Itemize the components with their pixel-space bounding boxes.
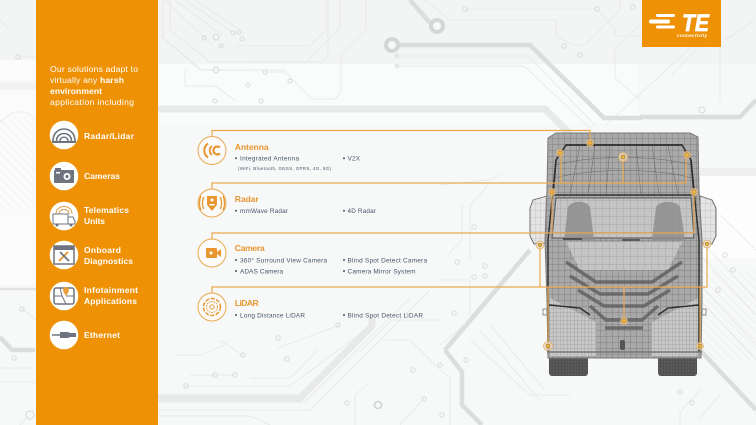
radar list: mmWave Radar <box>240 208 289 215</box>
heading: LiDAR: LiDAR <box>235 298 259 308</box>
section: Radar <box>198 189 377 217</box>
camera list: Camera Mirror System <box>348 268 416 275</box>
item: Cameras: Cameras <box>84 171 120 181</box>
lidar list: Blind Spot Detect LiDAR <box>348 312 423 319</box>
item: Telematics Units: Telematics <box>84 205 129 215</box>
camera list: 360° Surround View Camera <box>240 256 327 264</box>
antenna list: (WiFi, Bluetooth, GNSS, GPRS, 4G, 5G) <box>238 166 332 171</box>
item: Radar/Lidar <box>50 121 135 149</box>
item: Cameras <box>50 162 120 190</box>
item: Onboard Diagnostics <box>50 241 133 269</box>
heading: Antenna: Antenna <box>235 142 269 152</box>
logo: TE connectivity: connectivity <box>677 33 707 38</box>
sensor nodes <box>536 140 711 350</box>
antenna list <box>235 156 361 171</box>
left orange panel <box>36 0 158 425</box>
truck grille bands <box>566 262 682 328</box>
truck tires <box>549 352 697 376</box>
antenna list: Integrated Antenna <box>240 156 299 162</box>
truck windshield <box>553 145 694 195</box>
item: Onboard Diagnostics: Onboard <box>84 245 121 255</box>
antenna list: V2X <box>348 156 361 162</box>
truck curved glass lines <box>555 145 692 195</box>
camera list <box>235 256 427 275</box>
icon: camera <box>198 239 226 267</box>
section: LiDAR <box>198 293 423 321</box>
lidar list: Long Distance LiDAR <box>240 312 305 319</box>
item: Infotainment Applications: Infotainment <box>84 285 138 295</box>
item: Telematics Units: Units <box>84 216 105 226</box>
item: Telematics Units <box>50 202 129 230</box>
icon: radar <box>198 189 226 217</box>
camera list: Blind Spot Detect Camera <box>348 257 427 264</box>
intro text: Our solutions adapt to <box>50 64 138 74</box>
radar list: 4D Radar <box>348 208 377 215</box>
truck wireframe <box>530 133 716 376</box>
item: Ethernet: Ethernet <box>84 330 120 340</box>
heading: Radar: Radar <box>235 194 259 204</box>
item: Infotainment Applications: Applications <box>84 296 137 306</box>
icon: lidar <box>198 293 226 321</box>
camera list: ADAS Camera <box>240 268 283 275</box>
truck dark frame lines <box>547 145 702 352</box>
section: Antenna <box>198 136 361 171</box>
truck cab body <box>545 133 702 358</box>
logo: TE connectivity: TE <box>682 10 710 37</box>
intro text <box>50 64 138 107</box>
intro text: virtually any harsh <box>50 75 124 85</box>
connector lines <box>212 130 707 346</box>
item: Radar/Lidar: Radar/Lidar <box>84 131 135 141</box>
truck dense lower panels <box>550 242 698 356</box>
logo: TE connectivity <box>642 0 721 47</box>
section: Camera <box>198 239 427 275</box>
truck glass panel <box>552 198 694 238</box>
item: Onboard Diagnostics: Diagnostics <box>84 256 133 266</box>
item: Ethernet <box>50 321 120 349</box>
truck steering and details <box>543 309 706 350</box>
heading: Camera: Camera <box>235 243 265 253</box>
intro text: environment <box>50 86 102 96</box>
truck mirrors <box>530 196 716 244</box>
item: Infotainment Applications <box>50 282 138 310</box>
intro text: application including <box>50 97 134 107</box>
icon: antenna <box>198 136 226 164</box>
truck seats <box>564 202 685 240</box>
lidar list <box>235 312 423 319</box>
radar list <box>235 208 377 215</box>
